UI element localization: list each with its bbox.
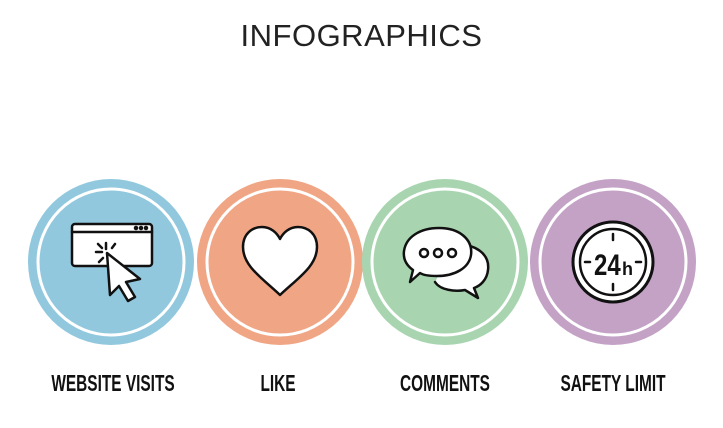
circle: website visits — [28, 179, 194, 345]
icon: 24h clock: 24 — [594, 247, 621, 282]
label: safety limit: SAFETY LIMIT — [560, 370, 666, 396]
circle: comments — [362, 179, 528, 345]
circle: like — [197, 179, 363, 345]
icon: 24h clock — [573, 222, 653, 302]
icon: browser with cursor — [72, 224, 152, 301]
label: comments: COMMENTS — [400, 370, 490, 396]
icon: speech bubbles — [404, 228, 488, 298]
icon: 24h clock: h — [622, 259, 633, 279]
title: INFOGRAPHICS — [241, 18, 482, 53]
icon: heart — [243, 227, 317, 295]
circle: safety limit — [530, 179, 696, 345]
label: like: LIKE — [260, 370, 296, 396]
label: website visits: WEBSITE VISITS — [51, 370, 175, 396]
